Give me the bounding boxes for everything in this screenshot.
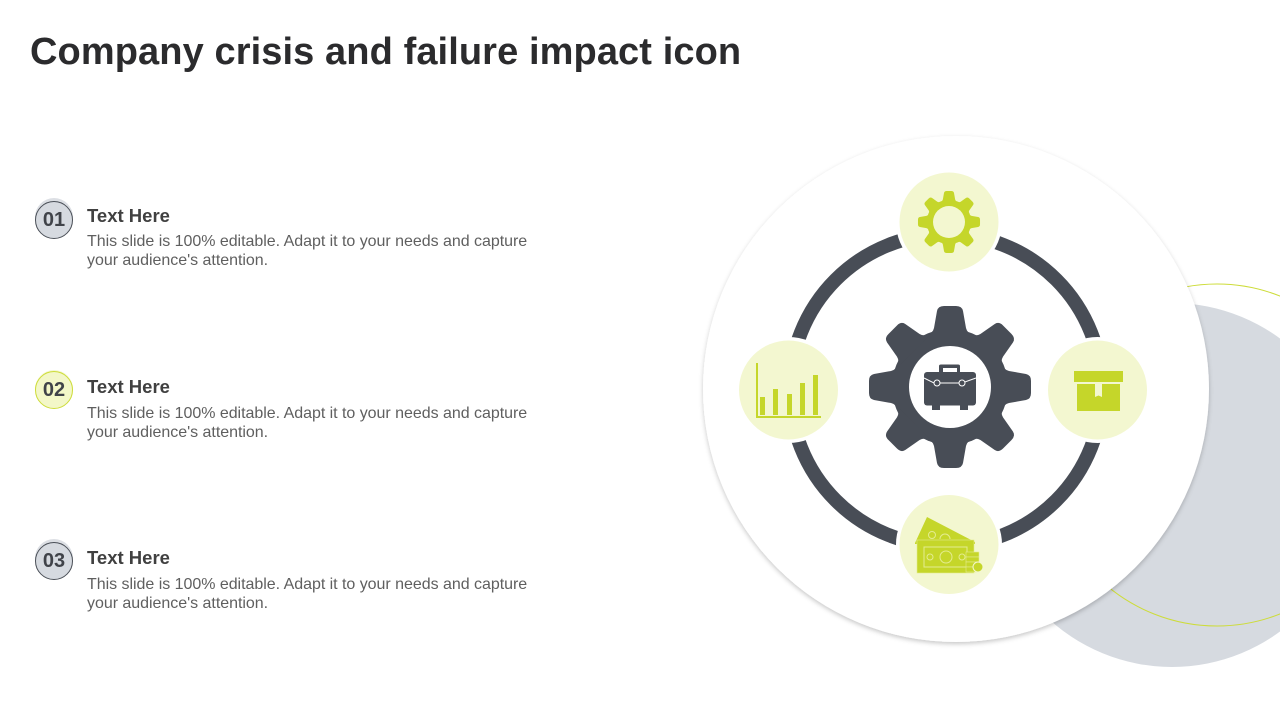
description 01: This slide is 100% editable. Adapt it to your needs and capture xyxy=(87,233,527,250)
list item 02 xyxy=(35,370,527,441)
badge 03: 03 xyxy=(43,550,65,572)
title: Company crisis and failure impact icon xyxy=(30,31,741,73)
badge 02: 02 xyxy=(43,379,65,401)
right node: box xyxy=(1044,337,1150,443)
list item 03 xyxy=(35,539,527,612)
description 03: This slide is 100% editable. Adapt it to your needs and capture xyxy=(87,576,527,593)
bottom node: money xyxy=(896,492,1002,598)
description 03: your audience's attention. xyxy=(87,595,268,612)
description 01: your audience's attention. xyxy=(87,252,268,269)
white main disc xyxy=(703,136,1209,642)
left node: bar chart xyxy=(736,337,842,443)
description 03 xyxy=(87,576,527,612)
heading 02: Text Here xyxy=(87,376,170,397)
list item 01 xyxy=(35,198,527,269)
description 02 xyxy=(87,405,527,441)
description 01 xyxy=(87,233,527,269)
description 02: This slide is 100% editable. Adapt it to your needs and capture xyxy=(87,405,527,422)
badge 02 xyxy=(35,371,73,409)
central gear icon xyxy=(869,306,1031,468)
thin yellow outline circle xyxy=(1046,284,1280,626)
icon: briefcase xyxy=(924,364,976,410)
badge 01: 01 xyxy=(43,209,65,231)
heading 03: Text Here xyxy=(87,547,170,568)
description 02: your audience's attention. xyxy=(87,424,268,441)
dark ring xyxy=(790,234,1102,546)
heading 01: Text Here xyxy=(87,205,170,226)
badge 03 xyxy=(35,542,73,580)
grey backdrop circle xyxy=(990,303,1280,667)
badge 01 xyxy=(35,201,73,239)
top node: gear xyxy=(896,169,1002,275)
